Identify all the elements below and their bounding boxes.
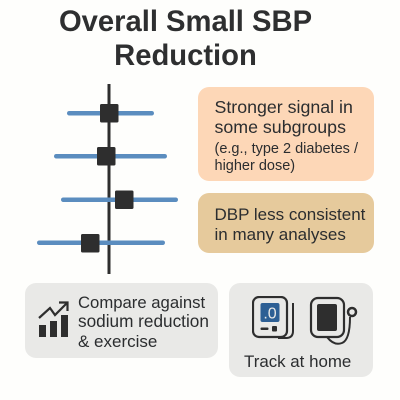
text: DBP [214,205,366,244]
study row 2 [54,147,167,166]
text: compare: sodium reduction [78,311,209,331]
text: compare: & exercise [78,332,157,350]
title [59,6,312,72]
text: DBP: DBP less consistent [214,205,365,224]
text: DBP: in many analyses [214,225,346,244]
panel: stronger signal [198,87,374,181]
text: compare: Compare against [78,292,205,312]
title: Reduction [114,40,257,72]
text: track at home: Track at home [244,352,351,370]
text: subgroup examples: higher dose) [214,158,295,174]
text: subgroup examples [214,141,358,174]
heading: stronger signal: Stronger signal in [214,97,353,117]
icon: rising bar chart [38,301,69,337]
panel: DBP less consistent [198,193,374,253]
text: compare [78,292,209,350]
heading: stronger signal: some subgroups [214,117,346,137]
study row 4 [37,234,165,252]
icon: home monitor [252,296,294,339]
panel: track at home [229,283,373,377]
panel: compare [25,283,218,358]
study row 1 [67,104,154,122]
icon: home monitor: .0 [263,306,277,322]
text: subgroup examples: (e.g., type 2 diabetes / [214,141,358,157]
study row 3 [61,190,178,209]
reference line [108,84,110,274]
heading: stronger signal [214,97,353,137]
title: Overall Small SBP [59,6,312,38]
icon: blood pressure cuff [310,296,358,345]
